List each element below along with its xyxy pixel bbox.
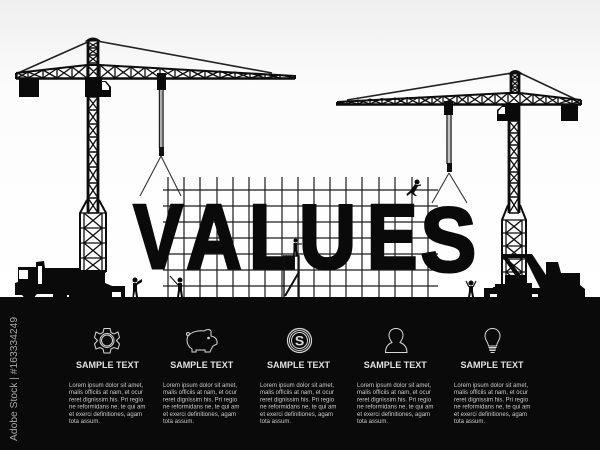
body text: ne reformidans ne, te qui am <box>454 405 530 411</box>
right tower crane <box>336 70 581 285</box>
body text: ne reformidans ne, te qui am <box>69 405 145 411</box>
heading: SAMPLE TEXT <box>364 360 427 370</box>
dark footer panel <box>0 297 600 450</box>
body text: Lorem ipsum dolor sit amet, <box>163 383 237 389</box>
scaffold platform and stairs <box>283 256 299 297</box>
heading: SAMPLE TEXT <box>170 360 234 370</box>
body text: ne reformidans ne, te qui am <box>163 405 239 411</box>
column 3: coin <box>260 328 336 425</box>
worker on scaffold <box>293 238 302 256</box>
headline: VALUES: E <box>367 185 417 288</box>
left crane stay cables <box>18 41 272 73</box>
body text: Lorem ipsum dolor sit amet, <box>454 383 528 389</box>
body text: ne reformidans ne, te qui am <box>260 405 336 411</box>
left tower crane <box>16 38 295 272</box>
icon: gear <box>94 328 120 353</box>
body text: tota assum. <box>163 419 194 425</box>
body text: reret dignissim his. Pri regio <box>454 397 529 403</box>
headline: VALUES: U <box>299 187 356 288</box>
body text: Lorem ipsum dolor sit amet, <box>260 383 334 389</box>
body text: ne reformidans ne, te qui am <box>357 405 433 411</box>
heading: SAMPLE TEXT <box>460 360 524 370</box>
right crane stay cables <box>347 73 575 100</box>
left crane jib <box>16 65 295 79</box>
right crane jib <box>336 93 581 105</box>
left crane mast <box>80 38 106 272</box>
body text: malis officiis at nam, et ocur <box>357 390 431 396</box>
body text: reret dignissim his. Pri regio <box>357 397 432 403</box>
body text: tota assum. <box>260 419 291 425</box>
worker with megaphone <box>132 278 142 297</box>
icon: person <box>386 328 407 352</box>
column 1: gear <box>69 328 145 425</box>
worker climbing <box>406 180 421 196</box>
left crane cab <box>85 77 111 97</box>
body text: malis officiis at nam, et ocur <box>163 390 237 396</box>
body text: reret dignissim his. Pri regio <box>163 397 238 403</box>
headline: VALUES: S <box>420 189 476 291</box>
icon: light bulb <box>485 328 500 352</box>
stock caption: Adobe Stock | #163334249 <box>9 317 20 441</box>
body text: malis officiis at nam, et ocur <box>454 390 528 396</box>
icon: coin: S <box>295 332 304 348</box>
column 2: piggy bank <box>163 330 239 425</box>
body text: reret dignissim his. Pri regio <box>260 397 335 403</box>
icon: piggy bank <box>186 330 217 352</box>
right crane cab <box>497 103 520 121</box>
body text: malis officiis at nam, et ocur <box>69 390 143 396</box>
worker under letter S <box>466 280 476 297</box>
heading: SAMPLE TEXT <box>267 360 330 370</box>
scaffolding grid <box>163 177 438 297</box>
right trolley and hook <box>432 101 467 203</box>
body text: tota assum. <box>69 419 100 425</box>
column 5: light bulb <box>454 328 530 425</box>
headline: VALUES <box>134 185 476 291</box>
body text: et exerci definitiones, agam <box>260 412 333 418</box>
heading: SAMPLE TEXT <box>76 360 139 370</box>
excavator <box>484 254 585 298</box>
body text: malis officiis at nam, et ocur <box>260 390 334 396</box>
body text: et exerci definitiones, agam <box>454 412 527 418</box>
body text: tota assum. <box>357 419 388 425</box>
left crane counterweight <box>19 79 39 97</box>
column 4: person <box>357 328 433 425</box>
body text: Lorem ipsum dolor sit amet, <box>69 383 143 389</box>
headline: VALUES: A <box>186 186 241 288</box>
body text: Lorem ipsum dolor sit amet, <box>357 383 431 389</box>
worker with rope <box>170 276 183 297</box>
headline: VALUES: L <box>249 186 296 287</box>
left trolley and hook <box>140 73 181 196</box>
body text: reret dignissim his. Pri regio <box>69 397 144 403</box>
right crane mast <box>502 70 526 285</box>
body text: tota assum. <box>454 419 485 425</box>
dump truck <box>15 261 125 298</box>
headline: VALUES: V <box>134 186 183 288</box>
body text: et exerci definitiones, agam <box>163 412 236 418</box>
body text: et exerci definitiones, agam <box>69 412 142 418</box>
body text: et exerci definitiones, agam <box>357 412 430 418</box>
right crane counterweight <box>561 105 578 121</box>
